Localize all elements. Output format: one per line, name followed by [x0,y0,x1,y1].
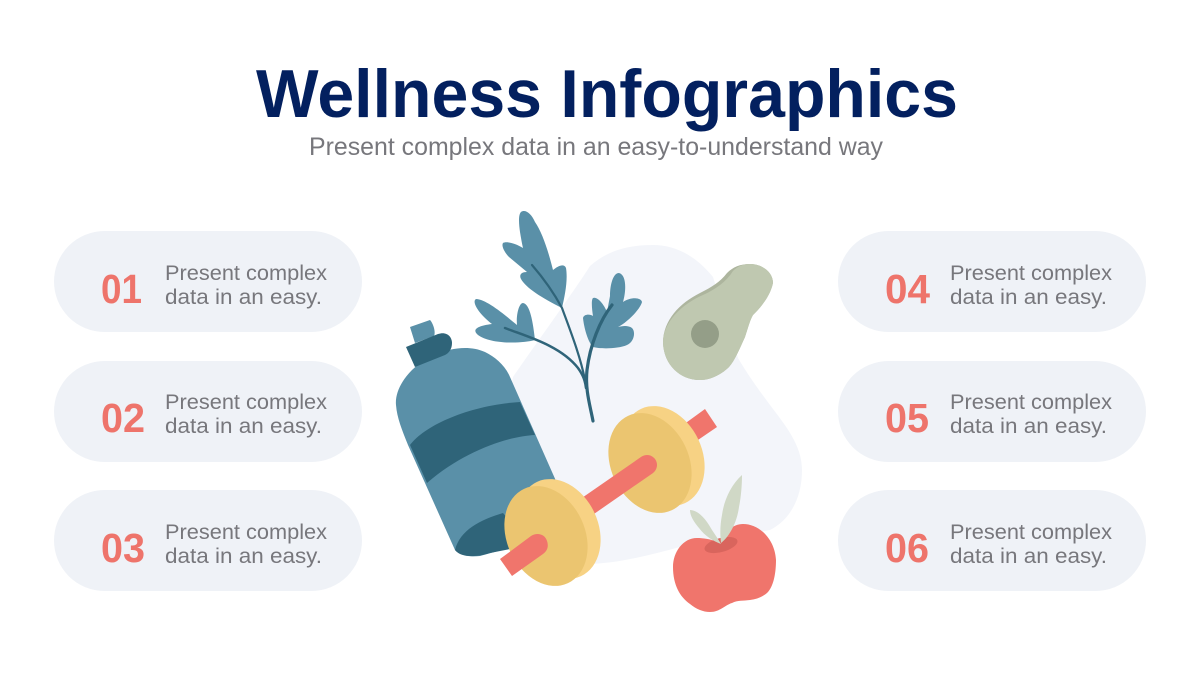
item 06: Present complex [950,521,1113,544]
item 01 [54,231,362,332]
item 06 [838,490,1146,591]
item 05 [838,361,1146,462]
item 03: data in an easy. [165,545,322,568]
item 01: Present complex [165,262,328,285]
icon: avocado [663,264,773,380]
item 04: 04 [885,266,930,312]
item 03: Present complex [165,521,328,544]
title: Wellness Infographics [256,56,958,132]
icon: plant [475,211,642,421]
item 06: 06 [885,525,929,571]
item 05: 05 [885,395,929,441]
item 02 [54,361,362,462]
item 01: 01 [101,266,142,312]
item 02: Present complex [165,391,328,414]
item 05: Present complex [950,391,1113,414]
subtitle: Present complex data in an easy-to-understand way [309,133,883,161]
item 05: data in an easy. [950,415,1107,438]
icon: water bottle [396,320,560,556]
item 06: data in an easy. [950,545,1107,568]
icon: apple [673,475,776,612]
item 03 [54,490,362,591]
item 04 [838,231,1146,332]
central wellness illustration [396,211,802,612]
item 02: 02 [101,395,145,441]
item 02: data in an easy. [165,415,322,438]
item 01: data in an easy. [165,286,322,309]
background blob [480,245,802,564]
icon: dumbbell [489,392,720,600]
item 03: 03 [101,525,145,571]
item 04: data in an easy. [950,286,1107,309]
item 04: Present complex [950,262,1113,285]
